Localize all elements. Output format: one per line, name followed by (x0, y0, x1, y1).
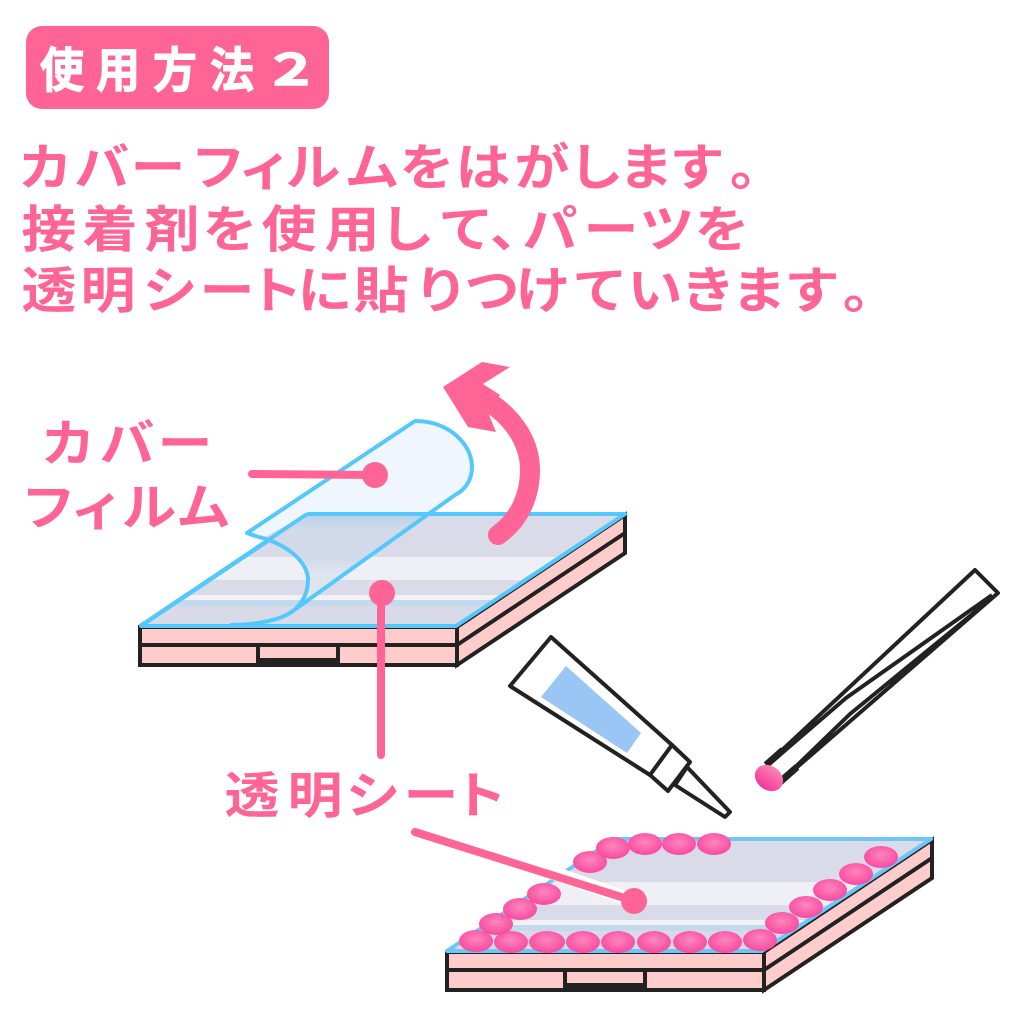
instruction text: 接着剤を使用して、パーツを (21, 202, 750, 258)
label: cover film: フィルム (21, 480, 231, 536)
arrow: peel direction (443, 362, 530, 535)
instruction text (18, 140, 898, 319)
label: cover film: カバー (40, 416, 213, 472)
case body (447, 840, 932, 990)
film outline (140, 421, 625, 626)
cover film peeled (247, 421, 472, 538)
illustration: case with parts attached (436, 833, 936, 990)
label: transparent sheet: 透明シート (225, 768, 507, 824)
film underside (263, 514, 430, 613)
badge: usage method 2: 使用方法 (40, 43, 254, 97)
illustration: case with film being peeled (130, 421, 630, 665)
label: cover film (21, 416, 388, 536)
case body (140, 515, 625, 665)
instruction text: 透明シートに貼りつけていきます。 (21, 263, 898, 319)
badge: usage method 2: ２ (263, 46, 319, 94)
icon: tweezers (750, 570, 998, 796)
transparent sheet (436, 835, 936, 953)
icon: glue tube (510, 637, 730, 817)
transparent sheet (130, 510, 630, 628)
badge: usage method 2 (26, 26, 329, 109)
instruction text: カバーフィルムをはがします。 (18, 140, 785, 196)
label: transparent sheet (225, 580, 647, 914)
pink parts (459, 833, 898, 953)
